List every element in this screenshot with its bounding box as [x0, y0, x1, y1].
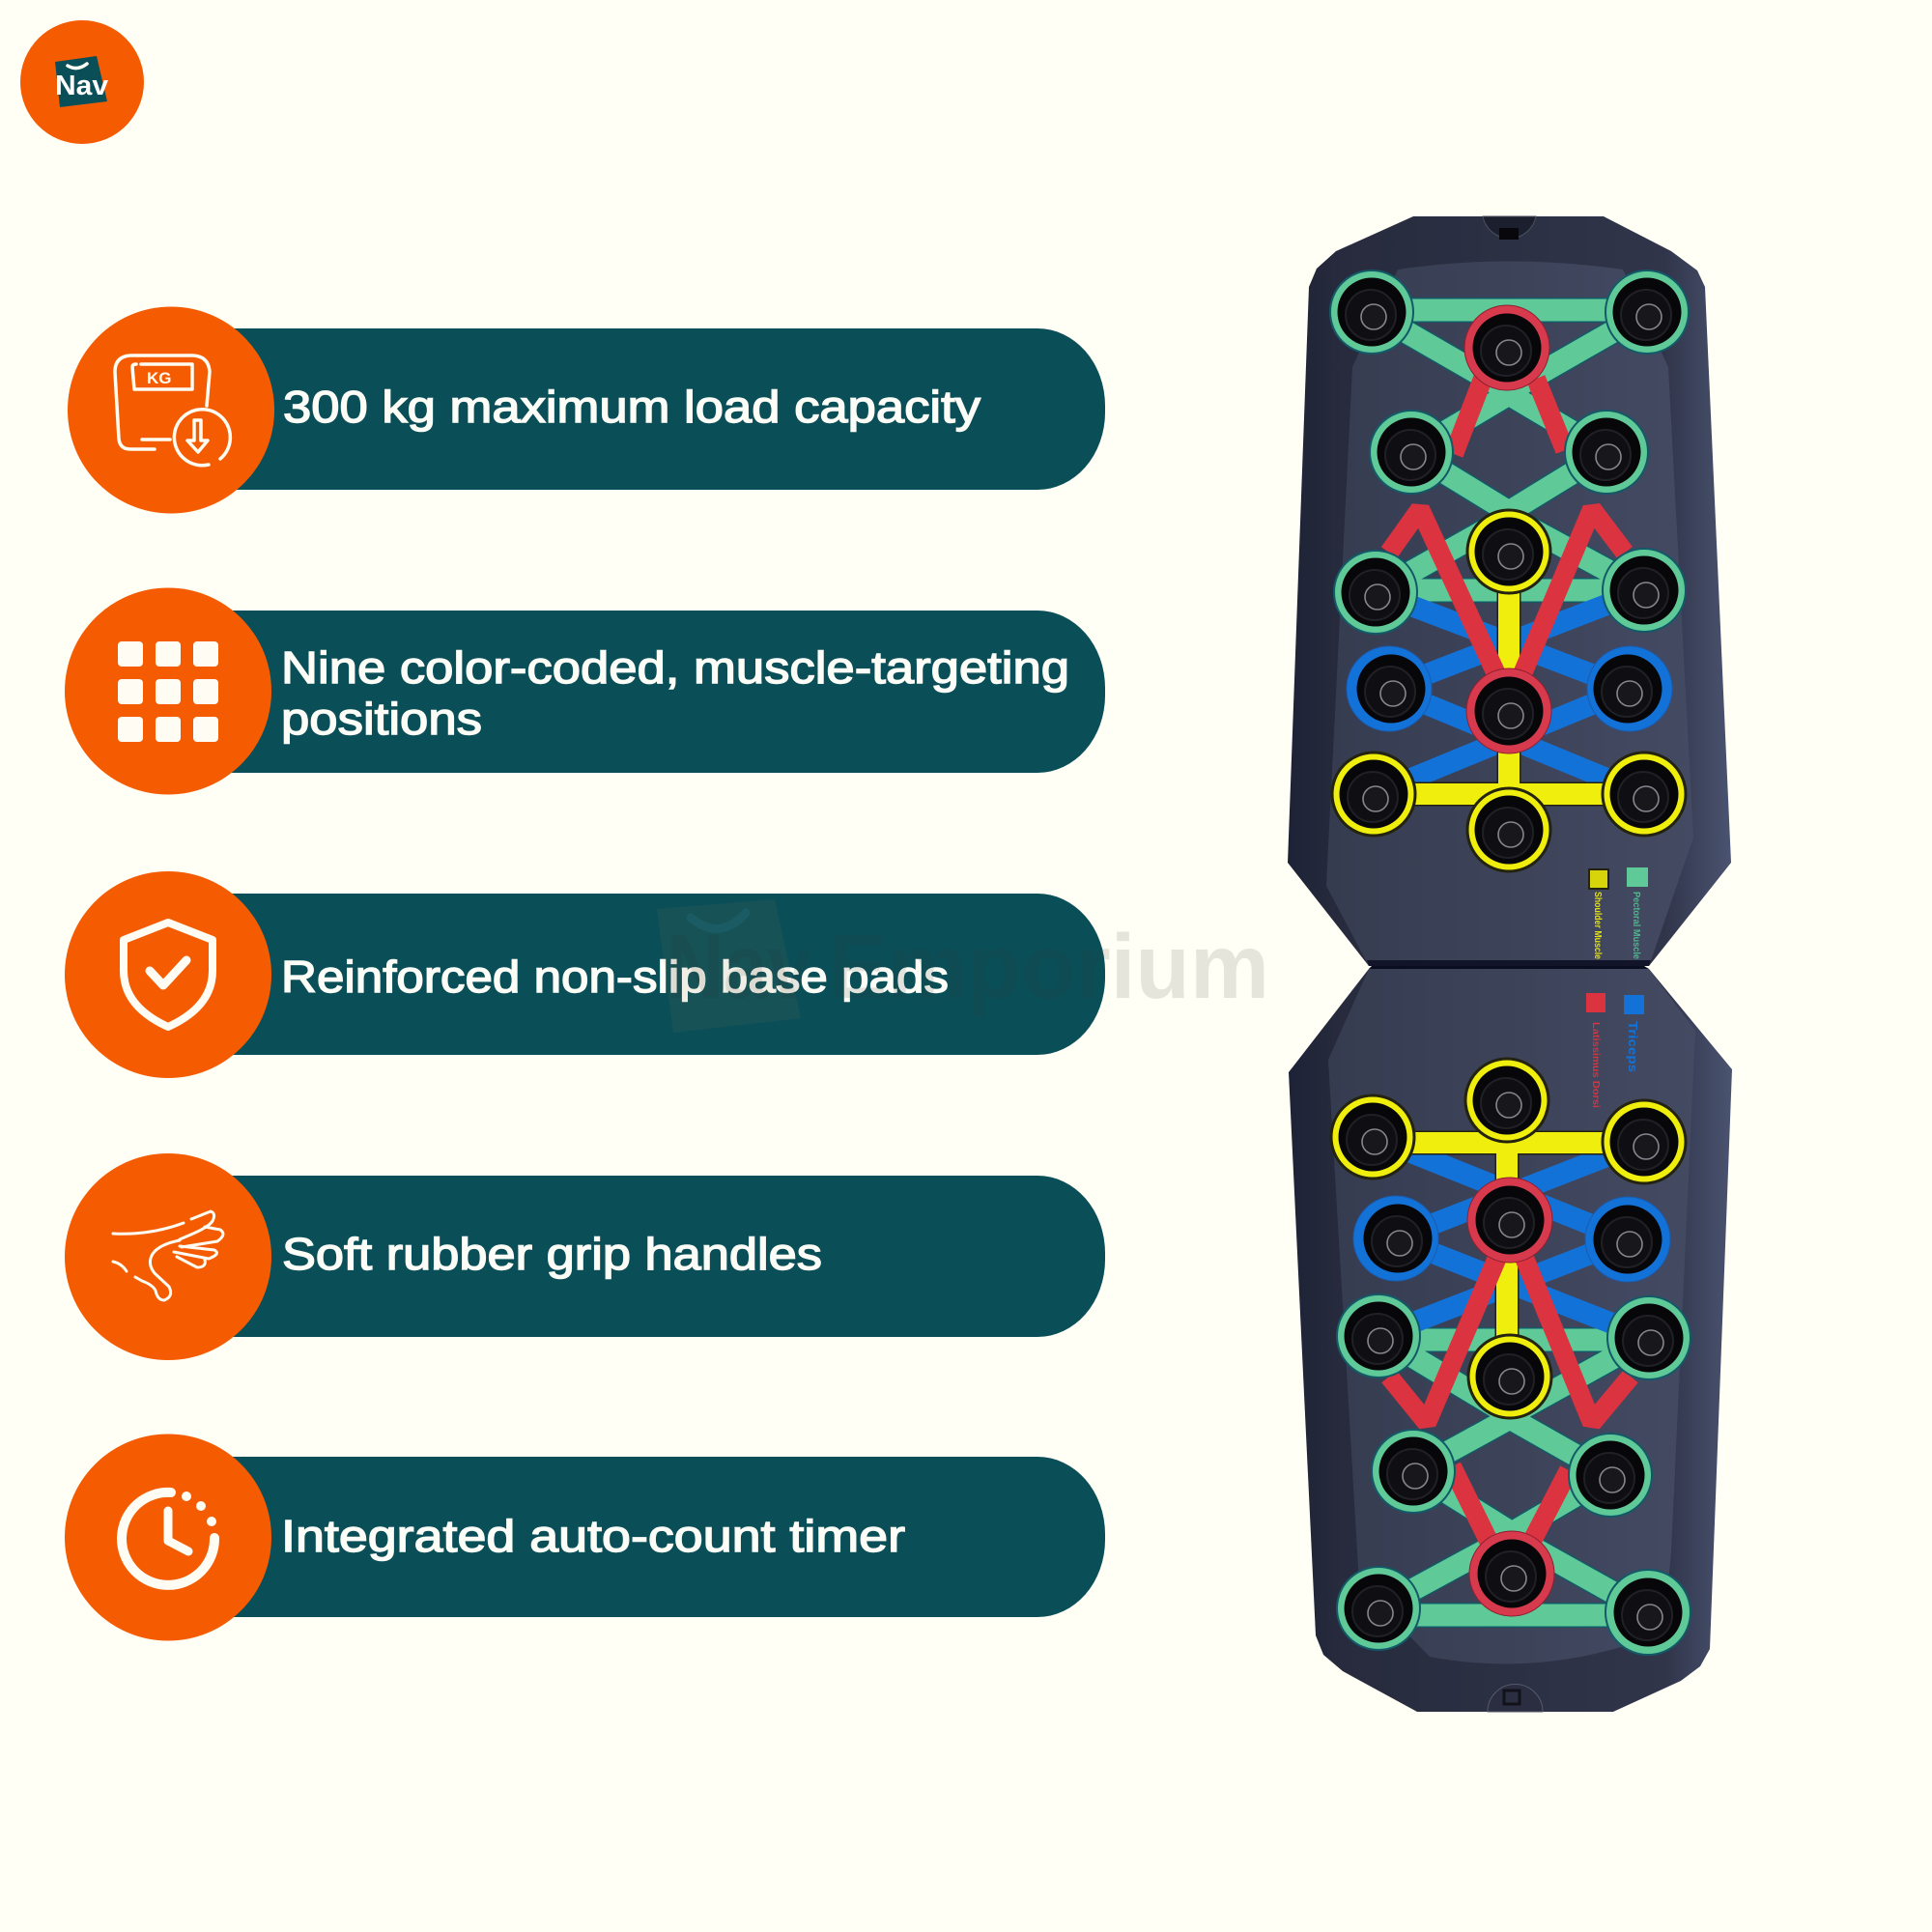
rings	[1330, 270, 1689, 634]
legend: latissimus and triceps: Latissimus Dorsi	[1590, 1022, 1601, 1108]
colored tracks	[1373, 1101, 1649, 1615]
label	[281, 642, 1069, 744]
watermark: Nav	[667, 916, 811, 1018]
icon: nine-square grid	[118, 641, 218, 742]
notch	[1483, 216, 1536, 240]
feature row: grip handles	[65, 1153, 1105, 1360]
notch	[1488, 1685, 1543, 1712]
watermark	[657, 899, 1269, 1033]
legend: latissimus and triceps: Triceps	[1626, 1021, 1640, 1072]
legend: shoulder and pectoral: Pectoral Muscle	[1631, 892, 1641, 959]
feature row: load capacity	[68, 307, 1105, 514]
label: Soft rubber grip handles	[282, 1229, 822, 1279]
product: lower board	[1289, 966, 1732, 1712]
label: Nine color-coded, muscle-targeting	[281, 642, 1069, 693]
colored tracks	[1372, 310, 1647, 794]
legend: shoulder and pectoral	[1589, 867, 1648, 959]
legend: latissimus and triceps	[1586, 993, 1644, 1108]
feature row: non-slip pads	[65, 871, 1105, 1078]
icon: weighing scale	[115, 355, 230, 466]
legend: shoulder and pectoral: Shoulder Muscle	[1592, 892, 1603, 959]
rings	[1337, 1294, 1690, 1655]
icon: hand	[113, 1211, 223, 1300]
bolts	[1337, 278, 1681, 864]
logo badge	[20, 20, 144, 144]
label: Reinforced non-slip base pads	[281, 952, 949, 1002]
icon: shield with check	[124, 923, 213, 1027]
label: 300 kg maximum load capacity	[283, 382, 980, 432]
icon: clock timer	[122, 1492, 216, 1585]
feature row: timer	[65, 1434, 1105, 1640]
bolts	[1339, 1066, 1683, 1646]
logo badge: Nav	[55, 71, 108, 101]
feature row: nine positions	[65, 587, 1105, 794]
label: positions	[281, 694, 482, 744]
watermark: Emporium	[828, 916, 1269, 1018]
label: Integrated auto-count timer	[281, 1511, 905, 1561]
product: upper board	[1288, 216, 1731, 966]
icon: weighing scale: KG	[147, 369, 172, 387]
